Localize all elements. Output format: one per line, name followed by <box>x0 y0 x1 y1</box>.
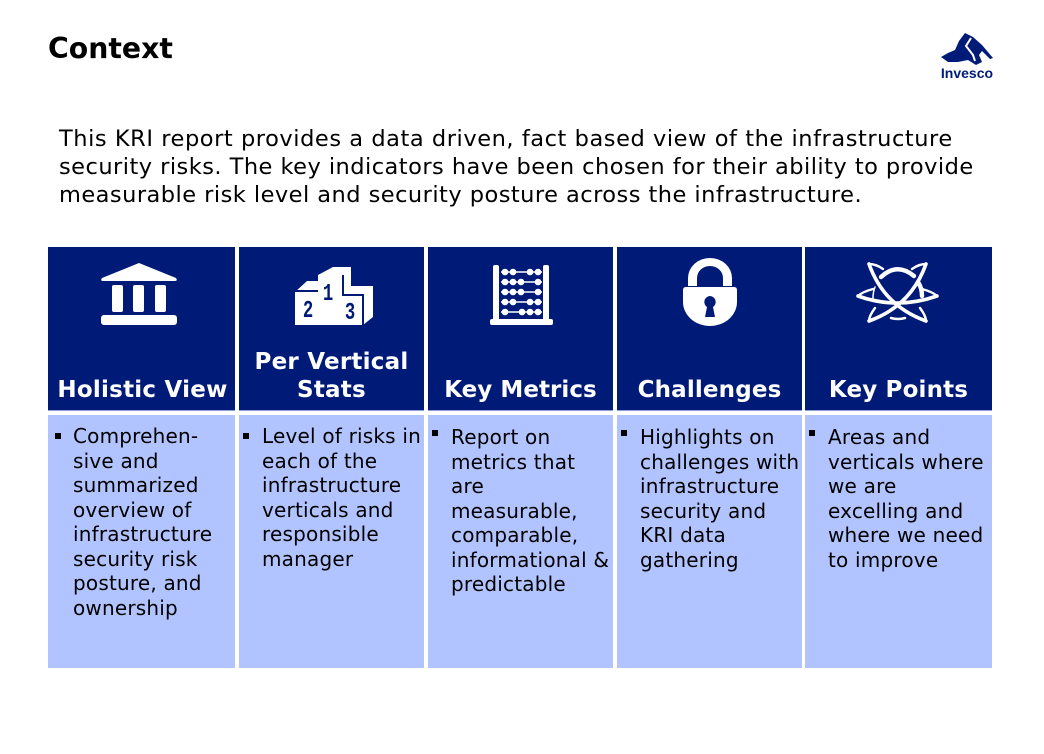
icon: institution building <box>101 263 177 325</box>
heading: Per Vertical <box>255 349 408 375</box>
icon: Invesco logo: Invesco <box>941 65 993 81</box>
bullet <box>432 430 438 436</box>
text block <box>640 425 799 572</box>
text block: Highlights on <box>640 425 775 449</box>
text block: infrastructure <box>73 522 212 546</box>
text block: responsible <box>262 522 379 546</box>
panel: Key Metrics header <box>428 247 613 410</box>
intro text: security risks. The key indicators have been chosen for their ability to provide <box>59 154 974 180</box>
intro text: measurable risk level and security posture across the infrastructure. <box>59 182 862 208</box>
text block: measurable, <box>451 498 578 522</box>
text block: KRI data <box>640 523 726 547</box>
text block: summarized <box>73 473 199 497</box>
icon: podium <box>295 267 373 327</box>
bullet <box>621 430 627 436</box>
text block: each of the <box>262 448 377 472</box>
panel: Key Points header <box>805 247 992 410</box>
text block: infrastructure <box>262 473 401 497</box>
text block: verticals and <box>262 498 394 522</box>
panel: Key Points body <box>805 415 992 668</box>
panel: Per Vertical Stats body <box>239 415 424 668</box>
bullet <box>809 430 815 436</box>
panel: Holistic View body <box>48 415 235 668</box>
text block: are <box>451 474 484 498</box>
icon: podium: 1 <box>323 282 333 308</box>
text block: sive and <box>73 448 159 472</box>
text block <box>451 425 609 596</box>
text block: excelling and <box>828 498 963 522</box>
text block: overview of <box>73 498 192 522</box>
bullet <box>55 433 61 439</box>
text block: metrics that <box>451 450 575 474</box>
text block: security and <box>640 498 766 522</box>
intro text: This KRI report provides a data driven, fact based view of the infrastructure <box>59 126 953 152</box>
heading: Key Points <box>829 377 968 403</box>
text block: informational & <box>451 548 609 572</box>
text block: security risk <box>73 546 198 570</box>
text block: where we need <box>828 523 983 547</box>
text block: challenges with <box>640 450 799 474</box>
text block: we are <box>828 474 897 498</box>
text block: Report on <box>451 425 550 449</box>
text block: comparable, <box>451 523 578 547</box>
text block: Areas and <box>828 425 930 449</box>
panel: Per Vertical Stats header <box>239 247 424 410</box>
panel: Key Metrics body <box>428 415 613 668</box>
heading: Stats <box>297 377 366 403</box>
icon: podium: 3 <box>345 301 355 327</box>
panel: Holistic View header <box>48 247 235 410</box>
panel: Challenges header <box>617 247 802 410</box>
icon: atom <box>856 262 939 323</box>
text block: posture, and <box>73 571 202 595</box>
text block: Comprehen- <box>73 424 198 448</box>
bullet <box>243 433 249 439</box>
title: Context <box>48 32 173 65</box>
text block: verticals where <box>828 450 984 474</box>
intro text <box>58 126 974 208</box>
heading: Key Metrics <box>444 377 597 403</box>
text block: predictable <box>451 572 566 596</box>
icon: padlock <box>683 258 737 326</box>
text block: Level of risks in <box>262 424 421 448</box>
text block: infrastructure <box>640 474 779 498</box>
icon: Invesco logo <box>941 33 993 81</box>
icon: podium: 2 <box>303 299 313 325</box>
panel: Challenges body <box>617 415 802 668</box>
heading <box>255 349 408 403</box>
heading: Challenges <box>638 377 781 403</box>
text block: to improve <box>828 548 938 572</box>
text block: manager <box>262 546 353 570</box>
icon: abacus <box>490 265 553 325</box>
text block: ownership <box>73 596 178 620</box>
text block <box>828 425 984 572</box>
text block <box>73 424 212 620</box>
text block: gathering <box>640 548 739 572</box>
text block <box>262 424 421 570</box>
heading: Holistic View <box>57 377 228 403</box>
